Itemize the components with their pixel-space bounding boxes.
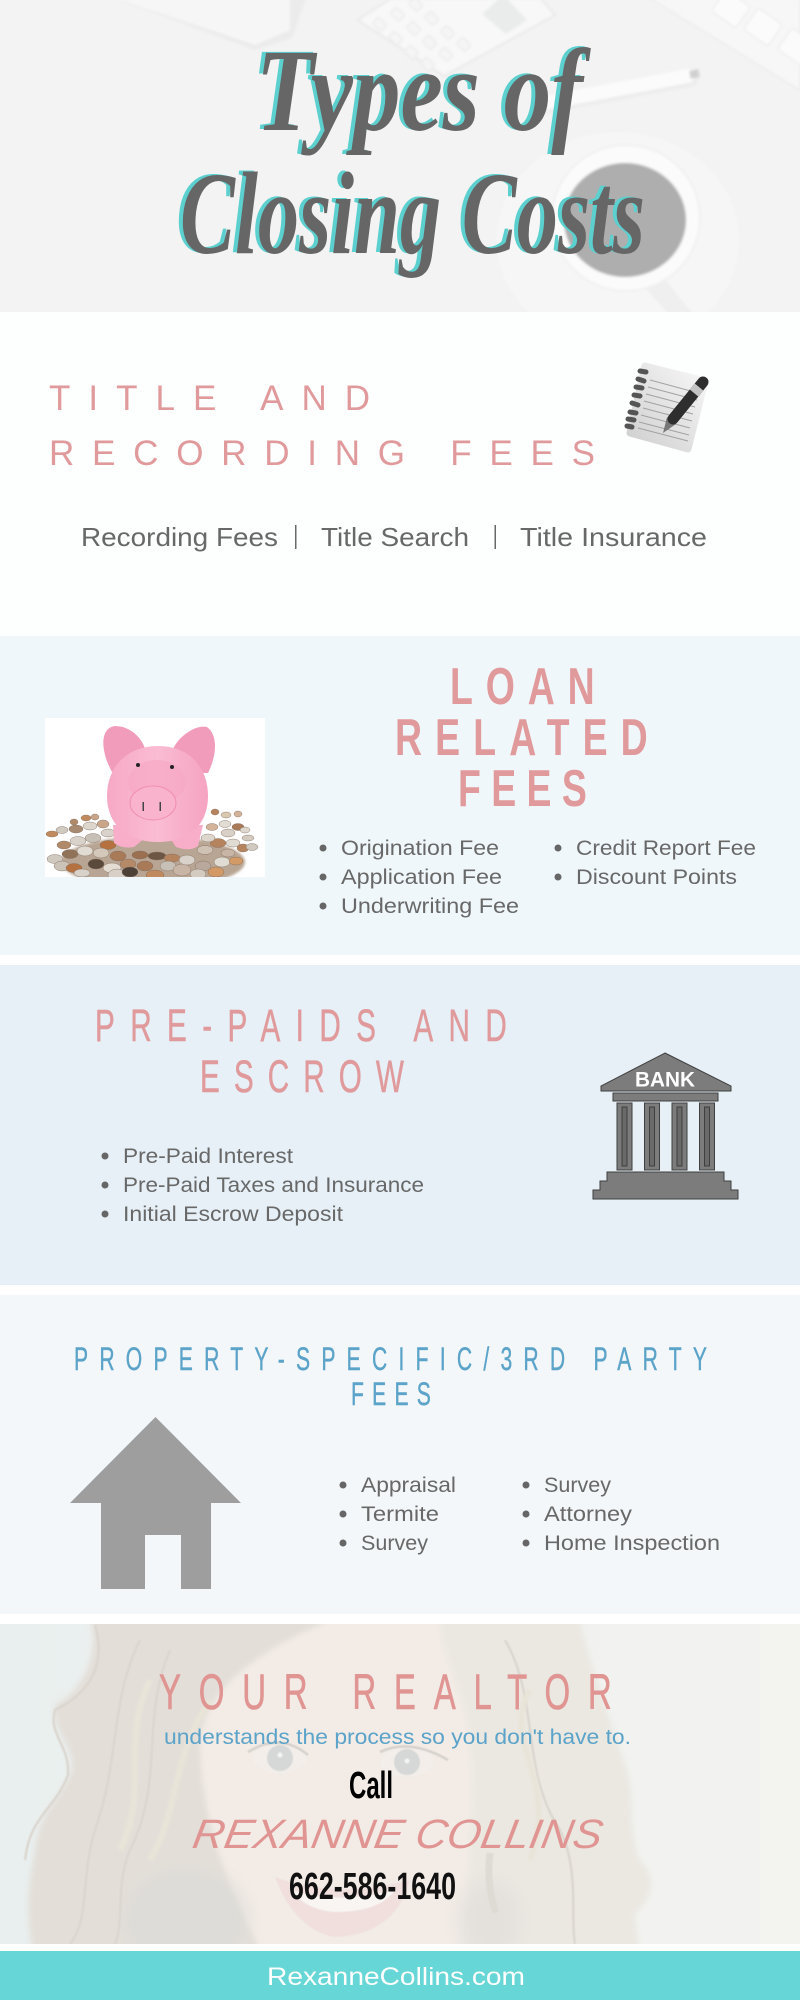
list: title fees <box>81 522 707 552</box>
icon: notepad and pen <box>627 366 705 449</box>
icon: bank: BANK <box>635 1068 695 1092</box>
list: loan fees: Discount Points <box>576 866 737 889</box>
list: pre-paids <box>102 1145 424 1226</box>
heading: title and recording fees <box>49 379 595 473</box>
heading: pre-paids and escrow <box>95 1001 507 1103</box>
list: loan fees: Credit Report Fee <box>576 837 756 860</box>
list: title fees: Title Insurance <box>520 522 707 552</box>
website: RexanneCollins.com <box>267 1963 525 1991</box>
panel: title and recording fees <box>0 312 800 636</box>
list: property fees: Survey <box>361 1532 429 1555</box>
list: loan fees <box>320 837 756 918</box>
icon: house <box>70 1417 241 1589</box>
background photo: realtor portrait <box>0 1620 800 1970</box>
agent name: REXANNE COLLINS <box>189 1811 607 1857</box>
panel: property-specific / 3rd party fees <box>0 1295 800 1614</box>
header background photo: desk <box>0 0 800 312</box>
footer bar <box>0 1951 800 2000</box>
panel: pre-paids and escrow <box>0 965 800 1285</box>
heading: title and recording fees: RECORDING FEES <box>49 434 595 473</box>
list: pre-paids: Pre-Paid Taxes and Insurance <box>123 1174 424 1197</box>
heading: loan related fees: RELATED <box>395 708 648 766</box>
list: loan fees: Underwriting Fee <box>341 895 519 918</box>
list: loan fees: Application Fee <box>341 866 502 889</box>
panel: loan related fees <box>0 636 800 955</box>
illustration: pig <box>103 726 215 849</box>
list: property fees: Attorney <box>544 1503 633 1526</box>
heading: your realtor: YOUR REALTOR <box>159 1664 612 1720</box>
tagline: understands the process so you don't have to. <box>164 1726 631 1749</box>
list: property fees: Survey <box>544 1474 612 1497</box>
header panel <box>0 0 800 312</box>
heading: property-specific fees <box>74 1340 707 1412</box>
heading: title and recording fees: TITLE AND <box>49 379 370 418</box>
list: pre-paids: Pre-Paid Interest <box>123 1145 293 1168</box>
heading: loan related fees <box>395 657 648 817</box>
heading: pre-paids and escrow: ESCROW <box>200 1052 404 1103</box>
list: pre-paids: Initial Escrow Deposit <box>123 1203 343 1226</box>
heading: loan related fees: FEES <box>458 759 587 817</box>
photo: piggy bank on coins <box>45 718 265 888</box>
list: title fees: Title Search <box>321 522 469 552</box>
heading: property-specific fees: PROPERTY-SPECIFIC/3RD PARTY <box>74 1340 707 1377</box>
title: Types of <box>256 25 592 156</box>
title <box>180 25 645 279</box>
list: property fees: Home Inspection <box>544 1532 720 1555</box>
list: property fees: Termite <box>361 1503 439 1526</box>
heading: loan related fees: LOAN <box>450 657 595 715</box>
list: property fees <box>340 1474 720 1555</box>
list: property fees: Appraisal <box>361 1474 456 1497</box>
heading: property-specific fees: FEES <box>351 1375 431 1412</box>
panel: your realtor <box>0 1620 800 1970</box>
list: loan fees: Origination Fee <box>341 837 499 860</box>
call label: Call <box>349 1765 393 1807</box>
icon: bank <box>593 1053 738 1199</box>
heading: pre-paids and escrow: PRE-PAIDS AND <box>95 1001 507 1052</box>
phone number: 662-586-1640 <box>289 1866 456 1908</box>
list: title fees: Recording Fees <box>81 522 278 552</box>
